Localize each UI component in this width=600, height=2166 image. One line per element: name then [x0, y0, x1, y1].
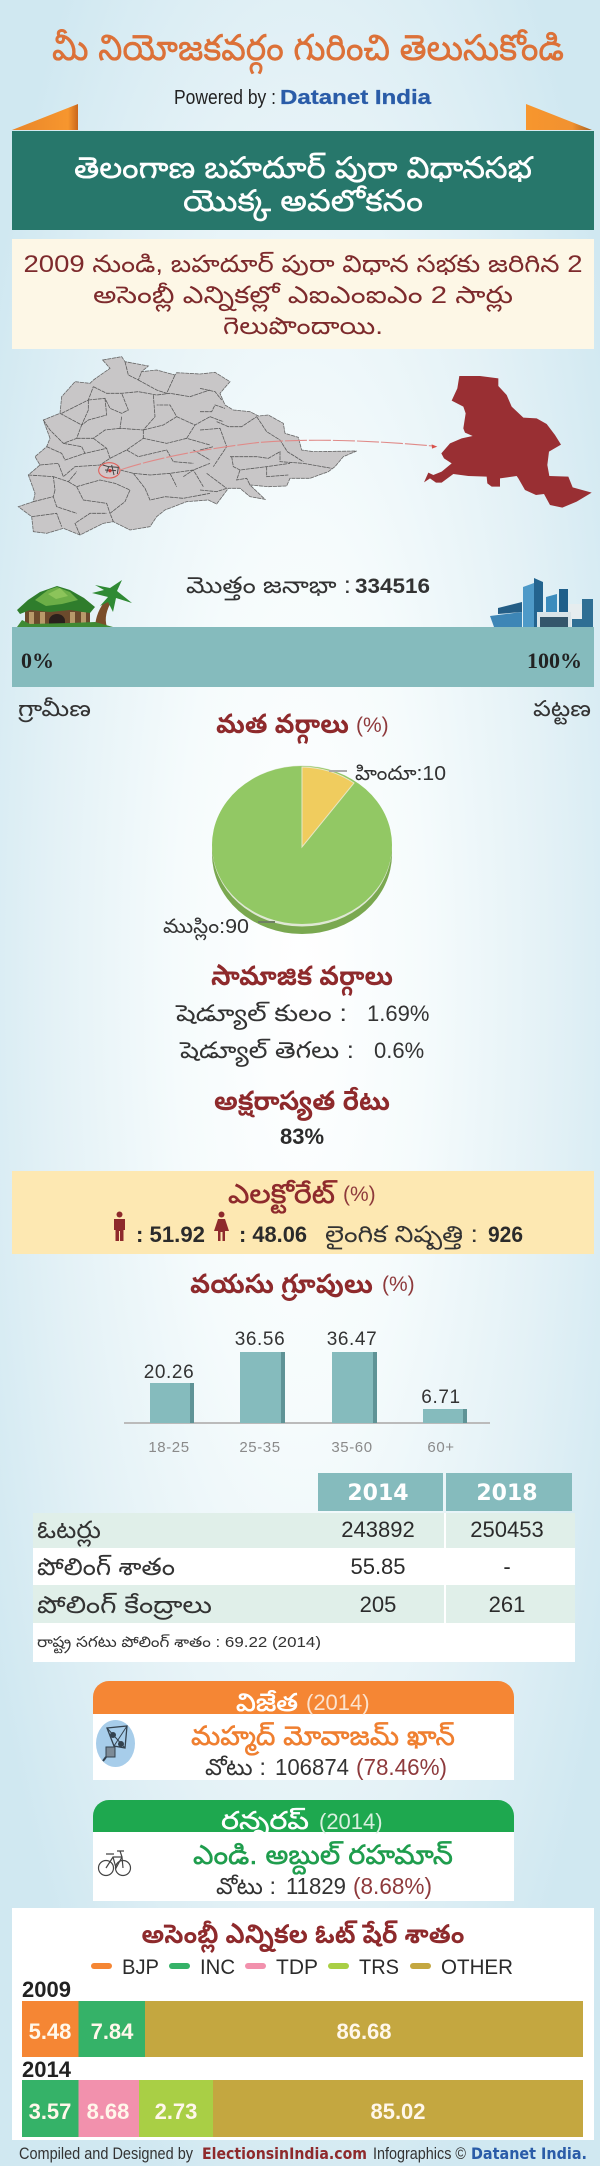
scheduled caste: 1.69%: [367, 1001, 429, 1026]
stacked bar: 2009: 5.48: [29, 2019, 71, 2044]
panel: assembly vote share: [12, 1908, 594, 2140]
table: voters and polling: 205: [360, 1592, 396, 1617]
pie chart: religion: [163, 763, 446, 941]
banner: constituency title: [12, 131, 594, 230]
banner ribbon folds: [12, 104, 592, 130]
map: Telangana state: [18, 357, 357, 535]
rural label: గ్రామీణ: [18, 696, 91, 723]
card: winner: విజేత: [236, 1689, 298, 1717]
table: voters and polling: -: [503, 1554, 511, 1579]
card: runner-up: (8.68%): [353, 1873, 432, 1899]
table: voters and polling: పోలింగ్ శాతం: [37, 1554, 175, 1581]
icon: kite symbol: [96, 1720, 135, 1767]
powered by line: [174, 87, 432, 109]
urban label: పట్టణ: [533, 696, 591, 725]
card: runner-up: (2014): [319, 1809, 383, 1834]
footer credits: Infographics ©: [373, 2144, 466, 2163]
panel: electorate: లైంగిక నిష్పత్తి :: [325, 1221, 478, 1250]
bar chart: age groups: 36.56: [235, 1329, 285, 1350]
legend: OTHER: [441, 1956, 513, 1979]
total population: మొత్తం జనాభా :: [186, 572, 351, 601]
stacked bar: 2009: 86.68: [336, 2019, 392, 2044]
card: winner: [93, 1681, 514, 1780]
panel: electorate: 926: [488, 1222, 523, 1247]
stacked bar: 2014: 2014: [22, 2057, 72, 2082]
legend: INC: [200, 1956, 235, 1979]
card: runner-up: ఎండి. అబ్దుల్ రహమాన్: [193, 1840, 453, 1875]
total population: [186, 572, 430, 601]
panel: electorate: [12, 1171, 594, 1254]
pie chart: religion: హిందూ:10: [355, 763, 446, 785]
stacked bar: 2014: 85.02: [370, 2099, 426, 2124]
stacked bar: 2014: [22, 2057, 583, 2137]
heading: vote share: అసెంబ్లీ ఎన్నికల ఓట్ షేర్ శాతం: [142, 1919, 464, 1954]
bar chart: age groups: 35-60: [331, 1439, 373, 1456]
table: voters and polling: రాష్ట్ర సగటు పోలింగ్ శాతం : 69.22 (2014): [37, 1634, 321, 1654]
heading: age groups: (%): [382, 1273, 415, 1296]
heading: religion: మత వర్గాలు: [216, 709, 349, 744]
table: voters and polling: 250453: [470, 1517, 544, 1542]
bar chart: age groups: 20.26: [144, 1362, 194, 1383]
panel: electorate: : 48.06: [239, 1222, 307, 1247]
footer credits: ElectionsinIndia.com: [202, 2144, 367, 2163]
table: voters and polling: 55.85: [350, 1554, 406, 1579]
rural urban bar: [12, 627, 594, 687]
scheduled tribe: [179, 1037, 424, 1067]
icon: urban buildings: [490, 578, 593, 627]
summary callout: [12, 239, 594, 349]
table: voters and polling: [33, 1473, 575, 1662]
panel: electorate: (%): [343, 1183, 376, 1206]
icon: rural hut: [17, 580, 132, 627]
scheduled caste: షెడ్యూల్ కులం :: [175, 1000, 347, 1030]
heading: age groups: వయసు గ్రూపులు: [190, 1269, 373, 1301]
summary callout: అసెంబ్లీ ఎన్నికల్లో ఎఐఎంఐఎం 2 సార్లు: [93, 282, 513, 312]
stacked bar: 2009: 7.84: [91, 2019, 134, 2044]
pie chart: religion: ముస్లిం:90: [163, 916, 249, 941]
stacked bar: 2014: 8.68: [87, 2099, 129, 2124]
bar chart: age groups: 6.71: [421, 1387, 461, 1408]
powered by line: Powered by :: [174, 87, 276, 109]
footer credits: Datanet India.: [471, 2144, 587, 2163]
rural urban bar: 0%: [21, 648, 54, 673]
bar chart: age groups: 25-35: [239, 1439, 281, 1456]
legend: [91, 1956, 513, 1979]
card: runner-up: [93, 1800, 514, 1901]
banner: constituency title: యొక్క అవలోకనం: [183, 185, 423, 222]
legend: TDP: [276, 1956, 318, 1979]
stacked bar: 2014: 3.57: [29, 2099, 71, 2124]
literacy value: 83%: [280, 1124, 324, 1149]
stacked bar: 2009: 2009: [22, 1977, 71, 2002]
card: winner: 106874: [275, 1754, 349, 1780]
table: voters and polling: పోలింగ్ కేంద్రాలు: [37, 1592, 212, 1620]
footer credits: [19, 2144, 587, 2163]
total population: 334516: [355, 575, 430, 598]
scheduled tribe: షెడ్యూల్ తెగలు :: [179, 1037, 354, 1067]
bar chart: age groups: [124, 1329, 490, 1456]
table: voters and polling: 2018: [476, 1481, 538, 1506]
bar chart: age groups: 60+: [427, 1439, 455, 1456]
rural urban bar: 100%: [527, 648, 582, 673]
card: winner: (78.46%): [356, 1754, 447, 1780]
heading: religion: (%): [356, 714, 389, 737]
panel: electorate: ఎలక్టోరేట్: [228, 1179, 337, 1214]
heading: social groups: సామాజిక వర్గాలు: [211, 961, 393, 996]
bar chart: age groups: 36.47: [327, 1329, 377, 1350]
bar chart: age groups: 18-25: [148, 1439, 190, 1456]
scheduled tribe: 0.6%: [374, 1038, 424, 1063]
arrow: state to constituency: [120, 440, 437, 470]
table: voters and polling: ఓటర్లు: [37, 1517, 101, 1547]
banner: constituency title: తెలంగాణ బహదూర్ పురా విధానసభ: [74, 152, 534, 185]
title: మీ నియోజకవర్గం గురించి తెలుసుకోండి: [52, 27, 564, 74]
stacked bar: 2014: 2.73: [155, 2099, 197, 2124]
footer credits: Compiled and Designed by: [19, 2144, 193, 2163]
card: winner: వోటు :: [205, 1754, 266, 1780]
card: runner-up: రన్నరప్: [221, 1807, 309, 1838]
table: voters and polling: 243892: [341, 1517, 415, 1542]
card: winner: మహ్మద్ మోవాజమ్ ఖాన్: [191, 1721, 455, 1756]
icon: bicycle symbol: [98, 1851, 130, 1876]
legend: TRS: [359, 1956, 399, 1979]
table: voters and polling: 261: [489, 1592, 525, 1617]
panel: electorate: : 51.92: [136, 1222, 205, 1247]
summary callout: 2009 నుండి, బహదూర్ పురా విధాన సభకు జరిగిన 2: [24, 251, 582, 278]
legend: BJP: [122, 1956, 159, 1979]
table: voters and polling: 2014: [347, 1481, 409, 1506]
summary callout: గెలుపొందాయి.: [223, 313, 383, 340]
map: constituency outline: [424, 376, 592, 508]
heading: literacy: అక్షరాస్యత రేటు: [214, 1086, 390, 1121]
scheduled caste: [175, 1000, 429, 1030]
card: runner-up: 11829: [286, 1873, 346, 1899]
stacked bar: 2009: [22, 1977, 583, 2057]
card: winner: (2014): [306, 1690, 370, 1715]
heading: religion: [216, 709, 389, 744]
card: runner-up: వోటు :: [216, 1873, 276, 1899]
powered by line: Datanet India: [280, 87, 432, 109]
